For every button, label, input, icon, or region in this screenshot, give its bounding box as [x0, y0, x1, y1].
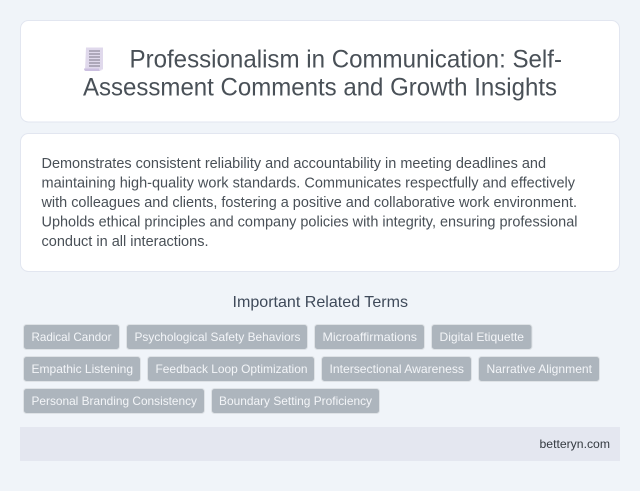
footer bar: [20, 427, 620, 461]
tag: Psychological Safety Behaviors: Psychological Safety Behaviors: [134, 330, 300, 344]
body text: [40, 156, 578, 250]
title text: [83, 46, 562, 102]
tag: Personal Branding Consistency: [24, 388, 204, 414]
tag: Personal Branding Consistency: Personal Branding Consistency: [32, 394, 197, 408]
body text: Demonstrates consistent reliability and accountability in meeting deadlines and: [42, 156, 546, 172]
body text: maintaining high-quality work standards. Communicates respectfully and effectively: [42, 176, 576, 192]
tag: Radical Candor: Radical Candor: [32, 330, 112, 344]
tag: Digital Etiquette: [432, 324, 532, 350]
tag: Empathic Listening: Empathic Listening: [32, 362, 133, 376]
tag: Boundary Setting Proficiency: Boundary Setting Proficiency: [219, 394, 372, 408]
body text: conduct in all interactions.: [42, 234, 208, 250]
title text: Professionalism in Communication: Self-: [130, 46, 562, 74]
tag: Psychological Safety Behaviors: [126, 324, 308, 350]
panel: assessment comment: [20, 134, 620, 272]
heading: important related terms: Important Related Terms: [232, 294, 408, 311]
body text: Upholds ethical principles and company policies with integrity, ensuring professional: [42, 214, 578, 230]
tag: Digital Etiquette: Digital Etiquette: [440, 330, 524, 344]
tag: Narrative Alignment: Narrative Alignment: [486, 362, 593, 376]
tag: Empathic Listening: [24, 356, 140, 382]
tag: Boundary Setting Proficiency: [212, 388, 380, 414]
tag: Intersectional Awareness: Intersectional Awareness: [330, 362, 464, 376]
panel: title card: [20, 20, 620, 122]
tag: Intersectional Awareness: [322, 356, 472, 382]
icon: scroll document: [84, 48, 103, 71]
tag: Feedback Loop Optimization: Feedback Loop Optimization: [156, 362, 308, 376]
tag: Microaffirmations: [314, 324, 424, 350]
tag: Narrative Alignment: [478, 356, 600, 382]
title text: Assessment Comments and Growth Insights: [83, 74, 557, 102]
body text: with colleagues and clients, fostering a positive and collaborative work environment.: [40, 195, 577, 211]
tag: Feedback Loop Optimization: [148, 356, 314, 382]
footer source: betteryn.com: [540, 437, 610, 451]
tag: Microaffirmations: Microaffirmations: [322, 330, 417, 344]
tag: Radical Candor: [24, 324, 120, 350]
tag list: [24, 324, 600, 414]
